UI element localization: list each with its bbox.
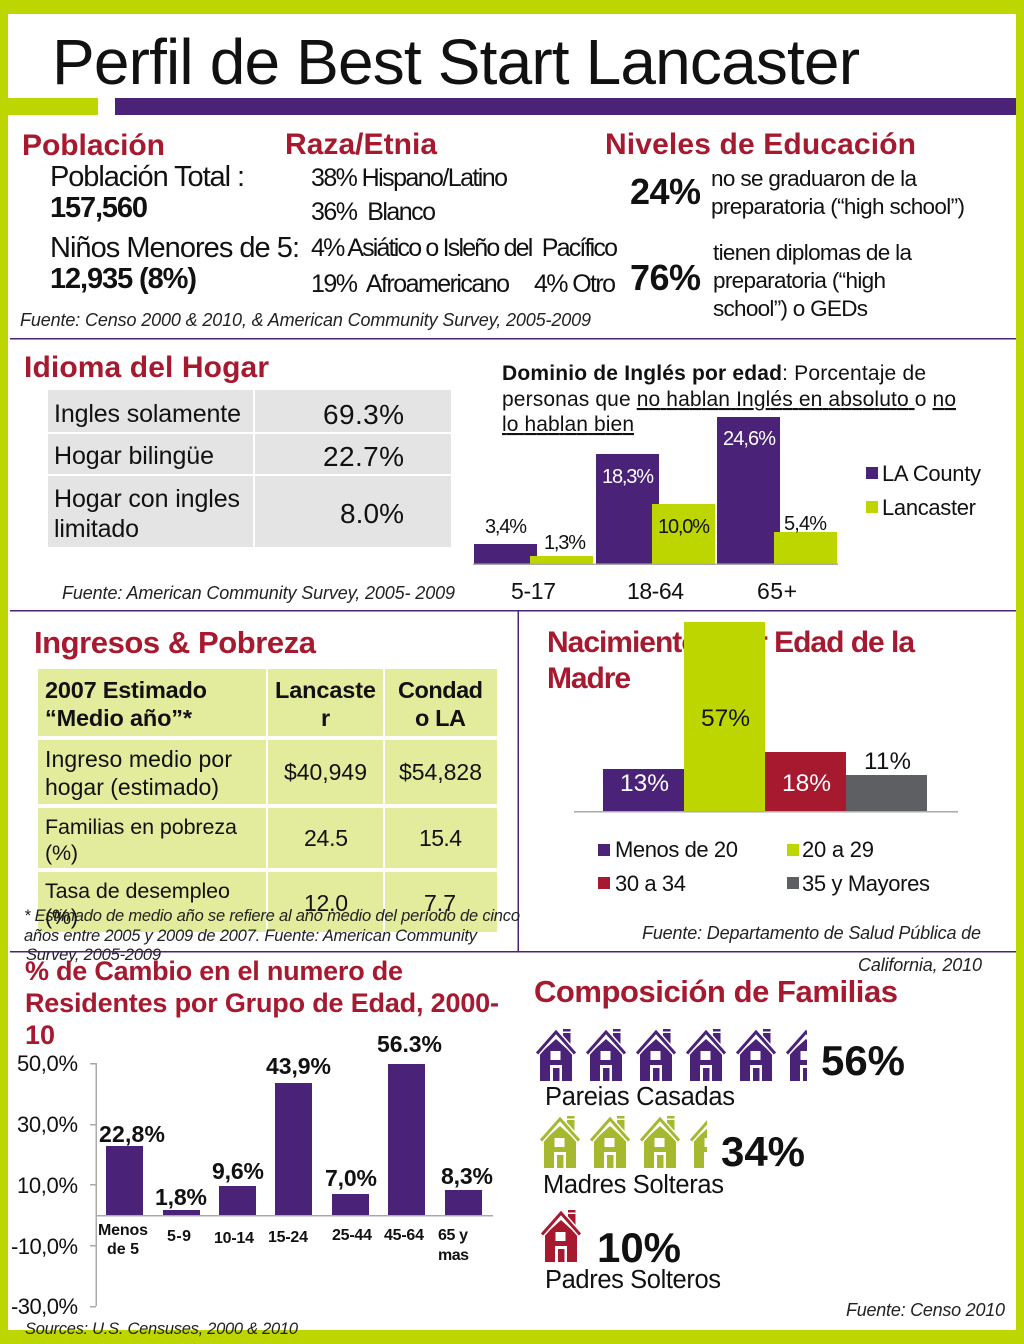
bar chart: births: 13% [620,770,669,797]
bar chart: population change by age: 65 y [438,1227,468,1244]
source: salud pública [642,923,982,975]
table: income: 15.4 [419,825,462,851]
bar chart: population change by age: 56.3% [377,1031,442,1057]
source: censuses: Sources: U.S. Censuses, 2000 & 2010 [25,1320,299,1338]
bar chart: population change by age: 30,0% [17,1112,78,1137]
table: income: hogar (estimado) [45,774,219,800]
table: income: r [321,705,330,731]
stat: 24%: 24% [630,171,701,212]
heading: idioma del hogar: Idioma del Hogar [24,351,269,384]
table: language: limitado [54,515,139,543]
panel: niveles de educación [605,128,965,321]
bar chart: population change by age: Menos [98,1222,148,1239]
bar chart: population change by age: 50,0% [17,1051,78,1076]
source: censo 2010: Fuente: Censo 2010 [846,1300,1005,1320]
table: language: Hogar bilingüe [54,442,214,470]
table: language [48,390,451,547]
panel: dominio de inglés [473,362,981,604]
table: language: 69.3% [323,399,404,430]
legend: english chart [866,461,981,520]
bar chart: population change by age: 7,0% [325,1165,377,1191]
bar chart: births: 57% [701,705,750,732]
heading: población: Población [22,129,165,162]
table: income: $54,828 [399,759,482,785]
bar chart: english by age: 3,4% [485,516,527,538]
bar chart: english by age: 24,6% [723,428,776,450]
bar chart: population change by age: 9,6% [212,1158,264,1184]
table: income: 12.0 [304,890,348,916]
icons: houses green [540,1116,707,1168]
panel: ingresos y pobreza [24,625,520,964]
text: race list: 4% Otro [534,270,616,298]
bar chart: population change by age: 43,9% [266,1053,331,1079]
text: no graduados: no se graduaron de la [711,166,917,191]
legend: births: Menos de 20 [615,837,738,862]
text: chart heading [502,362,956,436]
heading: nacimientos: Nacimientos por Edad de la [547,626,915,659]
table: income: o LA [415,705,466,731]
text: race list: 19% Afroamericano [311,270,510,298]
bar chart: population change by age: 45-64 [384,1227,424,1244]
footnote: Survey, 2005-2009 [26,946,161,964]
legend: english chart: LA County [882,461,981,486]
bar chart: english by age: 65+ [757,578,797,604]
table: language: Hogar con ingles [54,485,240,513]
stat: 76%: 76% [630,257,701,298]
bar chart: births: 18% [782,770,831,797]
heading: nacimientos: Madre [547,662,631,695]
table: income: 24.5 [304,825,348,851]
text: población total [50,161,245,224]
text: race list: 38% Hispano/Latino [311,164,508,192]
text: diplomas [713,240,912,321]
text: niños menores de 5: Niños Menores de 5: [50,232,300,264]
panel: % de cambio [11,956,499,1338]
title: Perfil de Best Start Lancaster [52,26,860,98]
source: acs: Fuente: American Community Survey, 2005- 2009 [62,583,455,603]
text: chart heading: Dominio de Inglés por edad: Porcentaje de [502,362,926,385]
text: no graduados [711,166,965,219]
source: censo: Fuente: Censo 2000 & 2010, & American Community Survey, 2005-2009 [20,310,591,330]
title rule [8,98,1016,115]
text: población total: 157,560 [50,192,148,224]
table: income [38,669,497,932]
bar chart: population change by age: 15-24 [268,1229,308,1246]
table: income: (%) [45,841,78,865]
bar chart: english by age: 18,3% [602,466,654,488]
text: race list: 4% Asiático o Isleño del Pacífico [311,234,618,262]
text: población total: Población Total : [50,161,245,193]
table: income: “Medio año”* [45,705,193,731]
table: income: Ingreso medio por [45,746,232,772]
heading: nacimientos [547,626,915,695]
bar chart: english by age: 5-17 [511,578,556,604]
bar chart: population change by age: -10,0% [11,1234,78,1259]
footnote: años entre 2005 y 2009 de 2007. Fuente: American Community [24,927,479,945]
dividers [10,338,1016,951]
table: income: Condad [398,677,483,703]
bar chart: english by age: 18-64 [627,578,684,604]
text: chart heading: lo hablan bien [502,413,634,436]
bar chart: population change by age: 8,3% [441,1163,493,1189]
text: diplomas: preparatoria (“high [713,268,886,293]
bar chart: population change by age: 10,0% [17,1173,78,1198]
bar chart: population change by age: 1,8% [155,1184,207,1210]
bar chart: population change by age: 5-9 [167,1228,191,1245]
panel: composición de familias [534,974,1005,1320]
table: language: 8.0% [340,498,404,529]
divider lower [10,951,1016,952]
table: income: Familias en pobreza [45,815,237,839]
panel: población [22,129,300,295]
icon: house red [542,1210,580,1262]
table: language: Ingles solamente [54,400,241,428]
table: income: 7.7 [424,890,456,916]
legend: births [598,837,930,896]
text: chart heading: personas que no hablan Inglés en absoluto o no [502,388,956,411]
heading: % de cambio: 10 [25,1020,55,1050]
bar chart: population change by age: 22,8% [99,1121,165,1147]
icons: houses purple [537,1029,825,1081]
bar chart: population change by age: -30,0% [11,1294,78,1319]
bar chart: population change by age: mas [438,1247,469,1264]
footnote: * Estimado de medio año se refiere al año medio del período de cinco [24,907,520,925]
bar chart: population change by age: 25-44 [332,1227,372,1244]
bar chart: births: 11% [864,748,911,775]
text: niños menores de 5 [50,232,300,295]
label: padres solteros: Padres Solteros [545,1266,721,1294]
panel: idioma del hogar [24,351,455,603]
heading: raza/etnia: Raza/Etnia [285,128,437,161]
bar chart: english by age: 10,0% [658,516,710,538]
table: income: 2007 Estimado [45,677,207,703]
source: salud pública: California, 2010 [858,955,982,975]
heading: % de cambio [25,956,499,1050]
bar chart: english by age: 5,4% [784,513,827,535]
table: language: 22.7% [323,441,404,472]
bar chart: population change by age: de 5 [107,1241,139,1258]
source: salud pública: Fuente: Departamento de Salud Pública de [642,923,981,943]
legend: births: 35 y Mayores [802,871,930,896]
text: diplomas: school”) o GEDs [713,296,868,321]
legend: births: 30 a 34 [615,871,686,896]
table: income: Lancaste [275,677,376,703]
label: parejas casadas: Parejas Casadas [545,1083,735,1111]
stat: 56%: 56% [821,1037,905,1084]
bar chart: births [574,622,958,812]
heading: composición de familias: Composición de Familias [534,974,898,1009]
bar chart: population change by age [11,1031,493,1319]
heading: ingresos y pobreza: Ingresos & Pobreza [34,625,317,660]
stat: 10%: 10% [597,1224,681,1271]
bar chart: population change by age: 10-14 [214,1230,254,1247]
text: diplomas: tienen diplomas de la [713,240,912,265]
heading: niveles de educación: Niveles de Educación [605,128,916,161]
table: income: (%) [45,905,78,929]
panel: nacimientos por edad de la madre [547,622,982,975]
bar chart: english by age [473,417,838,604]
text: race list [311,164,618,298]
text: niños menores de 5: 12,935 (8%) [50,263,197,295]
legend: births: 20 a 29 [802,837,874,862]
legend: english chart: Lancaster [882,495,976,520]
bar chart: english by age: 1,3% [544,532,586,554]
stat: 34%: 34% [721,1128,805,1175]
text: race list: 36% Blanco [311,198,436,226]
heading: % de cambio: % de Cambio en el numero de [25,956,403,986]
table: income: Tasa de desempleo [45,879,230,903]
panel: raza/etnia [285,128,618,298]
footnote [24,907,520,964]
table: income: $40,949 [284,759,367,785]
heading: % de cambio: Residentes por Grupo de Edad, 2000- [25,988,499,1018]
text: no graduados: preparatoria (“high school”) [711,194,965,219]
label: madres solteras: Madres Solteras [543,1171,724,1199]
